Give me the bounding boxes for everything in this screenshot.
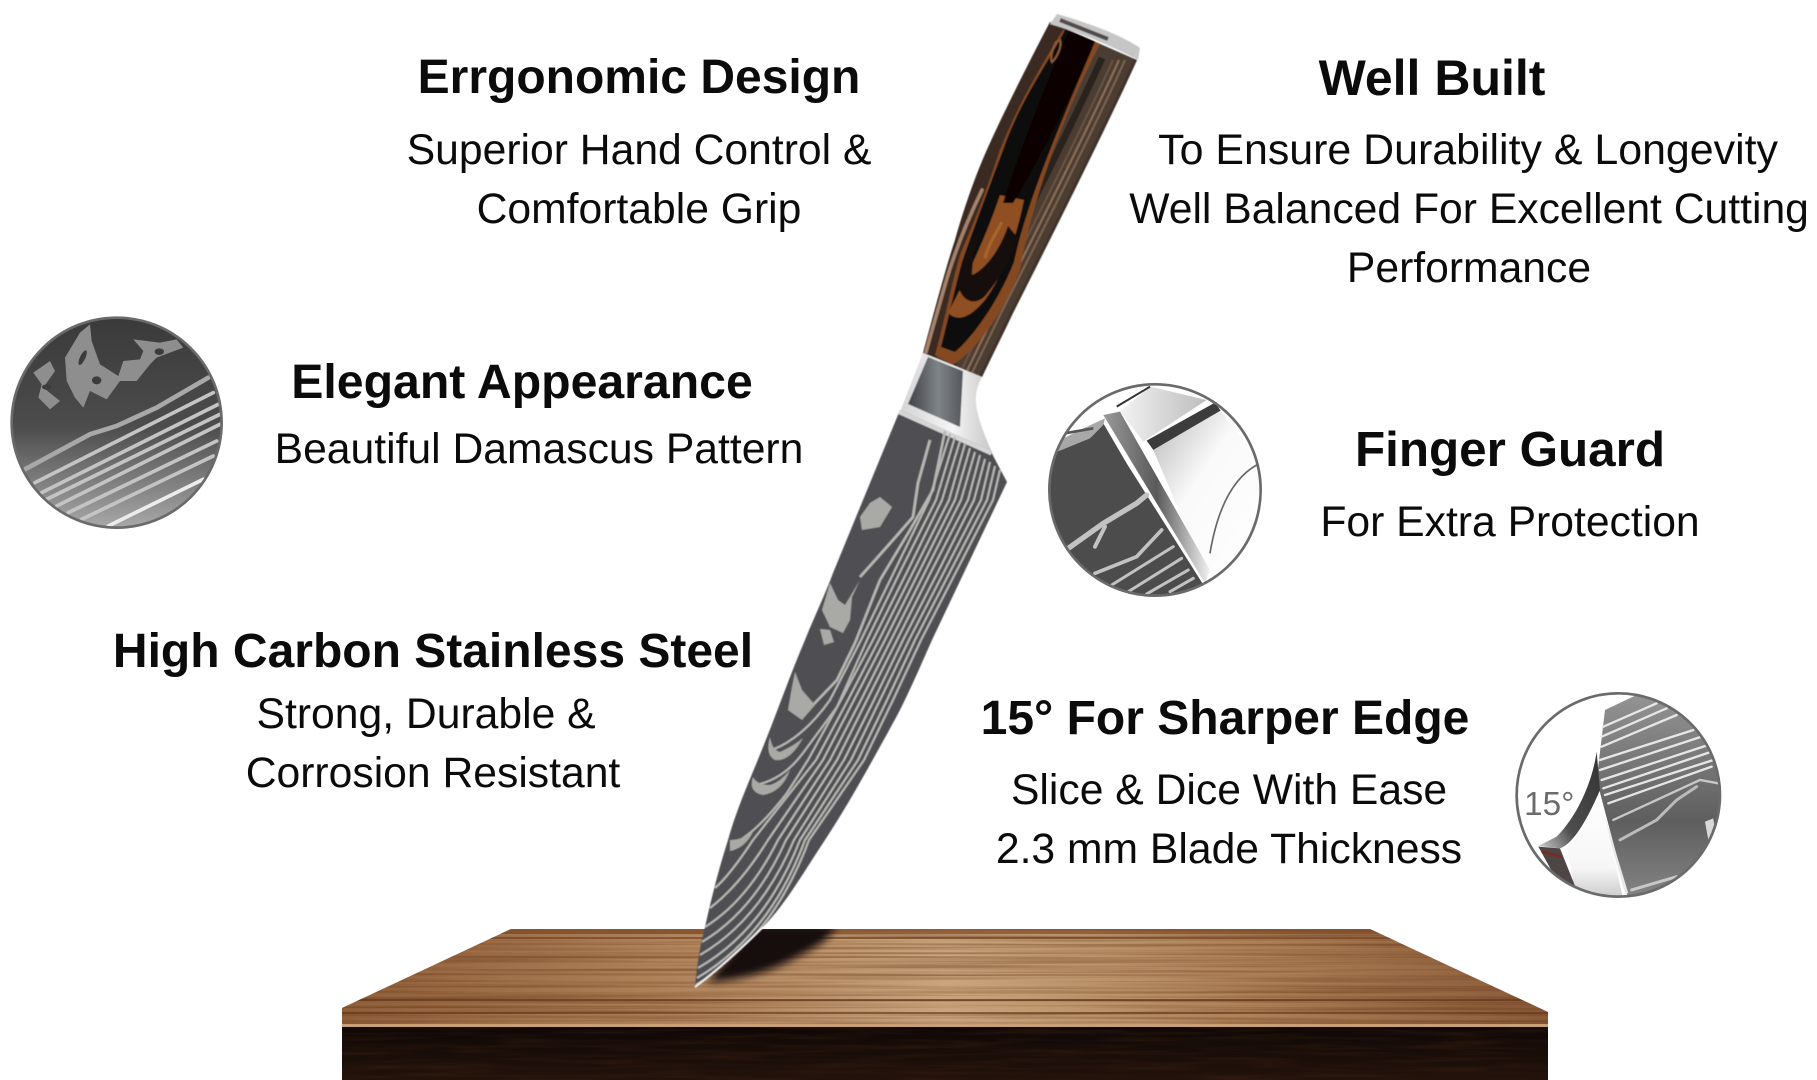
heading: ergonomic design: Errgonomic Design	[418, 51, 860, 104]
text: sharper edge description: 2.3 mm Blade Thickness	[996, 825, 1462, 873]
closeup handle	[1538, 846, 1575, 886]
blade cutting edge highlight	[695, 927, 763, 987]
circle: 15 degree edge closeup	[1517, 693, 1733, 900]
text: sharper edge description: Slice & Dice With Ease	[1011, 766, 1447, 814]
closeup blade side	[1598, 696, 1719, 895]
wooden cutting board	[342, 929, 1552, 1080]
handle small knot	[1051, 40, 1061, 62]
feature: high carbon steel	[113, 625, 753, 797]
circle: finger guard closeup	[1040, 384, 1267, 603]
text: elegant description: Beautiful Damascus Pattern	[275, 425, 803, 473]
text: ergonomic description: Comfortable Grip	[477, 185, 801, 233]
circle: damascus pattern closeup	[12, 318, 222, 528]
feature: ergonomic design	[407, 51, 883, 233]
handle inner orange ring	[948, 195, 1024, 318]
blade etched blobs	[730, 497, 892, 851]
blade damascus pattern	[696, 410, 1000, 985]
text: ergonomic description: Superior Hand Control &	[407, 126, 871, 174]
handle top core	[1003, 28, 1097, 203]
closeup chrome bolster	[1120, 387, 1207, 442]
board front face	[342, 1027, 1548, 1080]
heading: sharper edge: 15° For Sharper Edge	[981, 692, 1469, 745]
knife bolster	[900, 353, 1005, 480]
damascus lines	[25, 378, 220, 526]
heading: well built: Well Built	[1319, 50, 1546, 106]
text: well built description: Well Balanced For Excellent Cutting	[1129, 185, 1809, 233]
text: steel description: Corrosion Resistant	[246, 749, 620, 797]
closeup edge bevel	[1598, 794, 1628, 894]
handle black core	[941, 28, 1097, 352]
handle black crescent	[958, 226, 1018, 301]
closeup blade lines	[1600, 703, 1718, 890]
handle outer orange grain	[935, 30, 1102, 365]
heading: elegant appearance: Elegant Appearance	[291, 355, 753, 409]
label 15 degrees: 15°	[1524, 786, 1575, 823]
board top surface	[342, 929, 1552, 1027]
handle butt cap	[1050, 14, 1140, 60]
knife shadow on board	[708, 925, 836, 982]
damascus blobs	[65, 324, 183, 408]
handle right stripes	[947, 58, 1137, 377]
heading: finger guard: Finger Guard	[1355, 422, 1665, 477]
heading: high carbon stainless steel: High Carbon Stainless Steel	[113, 625, 753, 678]
text: finger guard description: For Extra Protection	[1320, 498, 1700, 546]
text: steel description: Strong, Durable &	[257, 690, 596, 738]
feature: finger guard	[1320, 422, 1700, 546]
feature: well built	[1129, 50, 1817, 292]
chef knife	[695, 14, 1140, 987]
text: well built description: To Ensure Durability & Longevity	[1158, 126, 1779, 174]
closeup blade	[1050, 424, 1202, 594]
knife handle	[923, 14, 1140, 377]
text: well built description: Performance	[1347, 244, 1591, 292]
feature: elegant appearance	[275, 355, 803, 473]
handle left stripe	[923, 22, 1070, 358]
closeup blade lines	[1068, 495, 1193, 594]
feature: sharper edge	[981, 692, 1469, 873]
knife blade	[695, 410, 1007, 987]
